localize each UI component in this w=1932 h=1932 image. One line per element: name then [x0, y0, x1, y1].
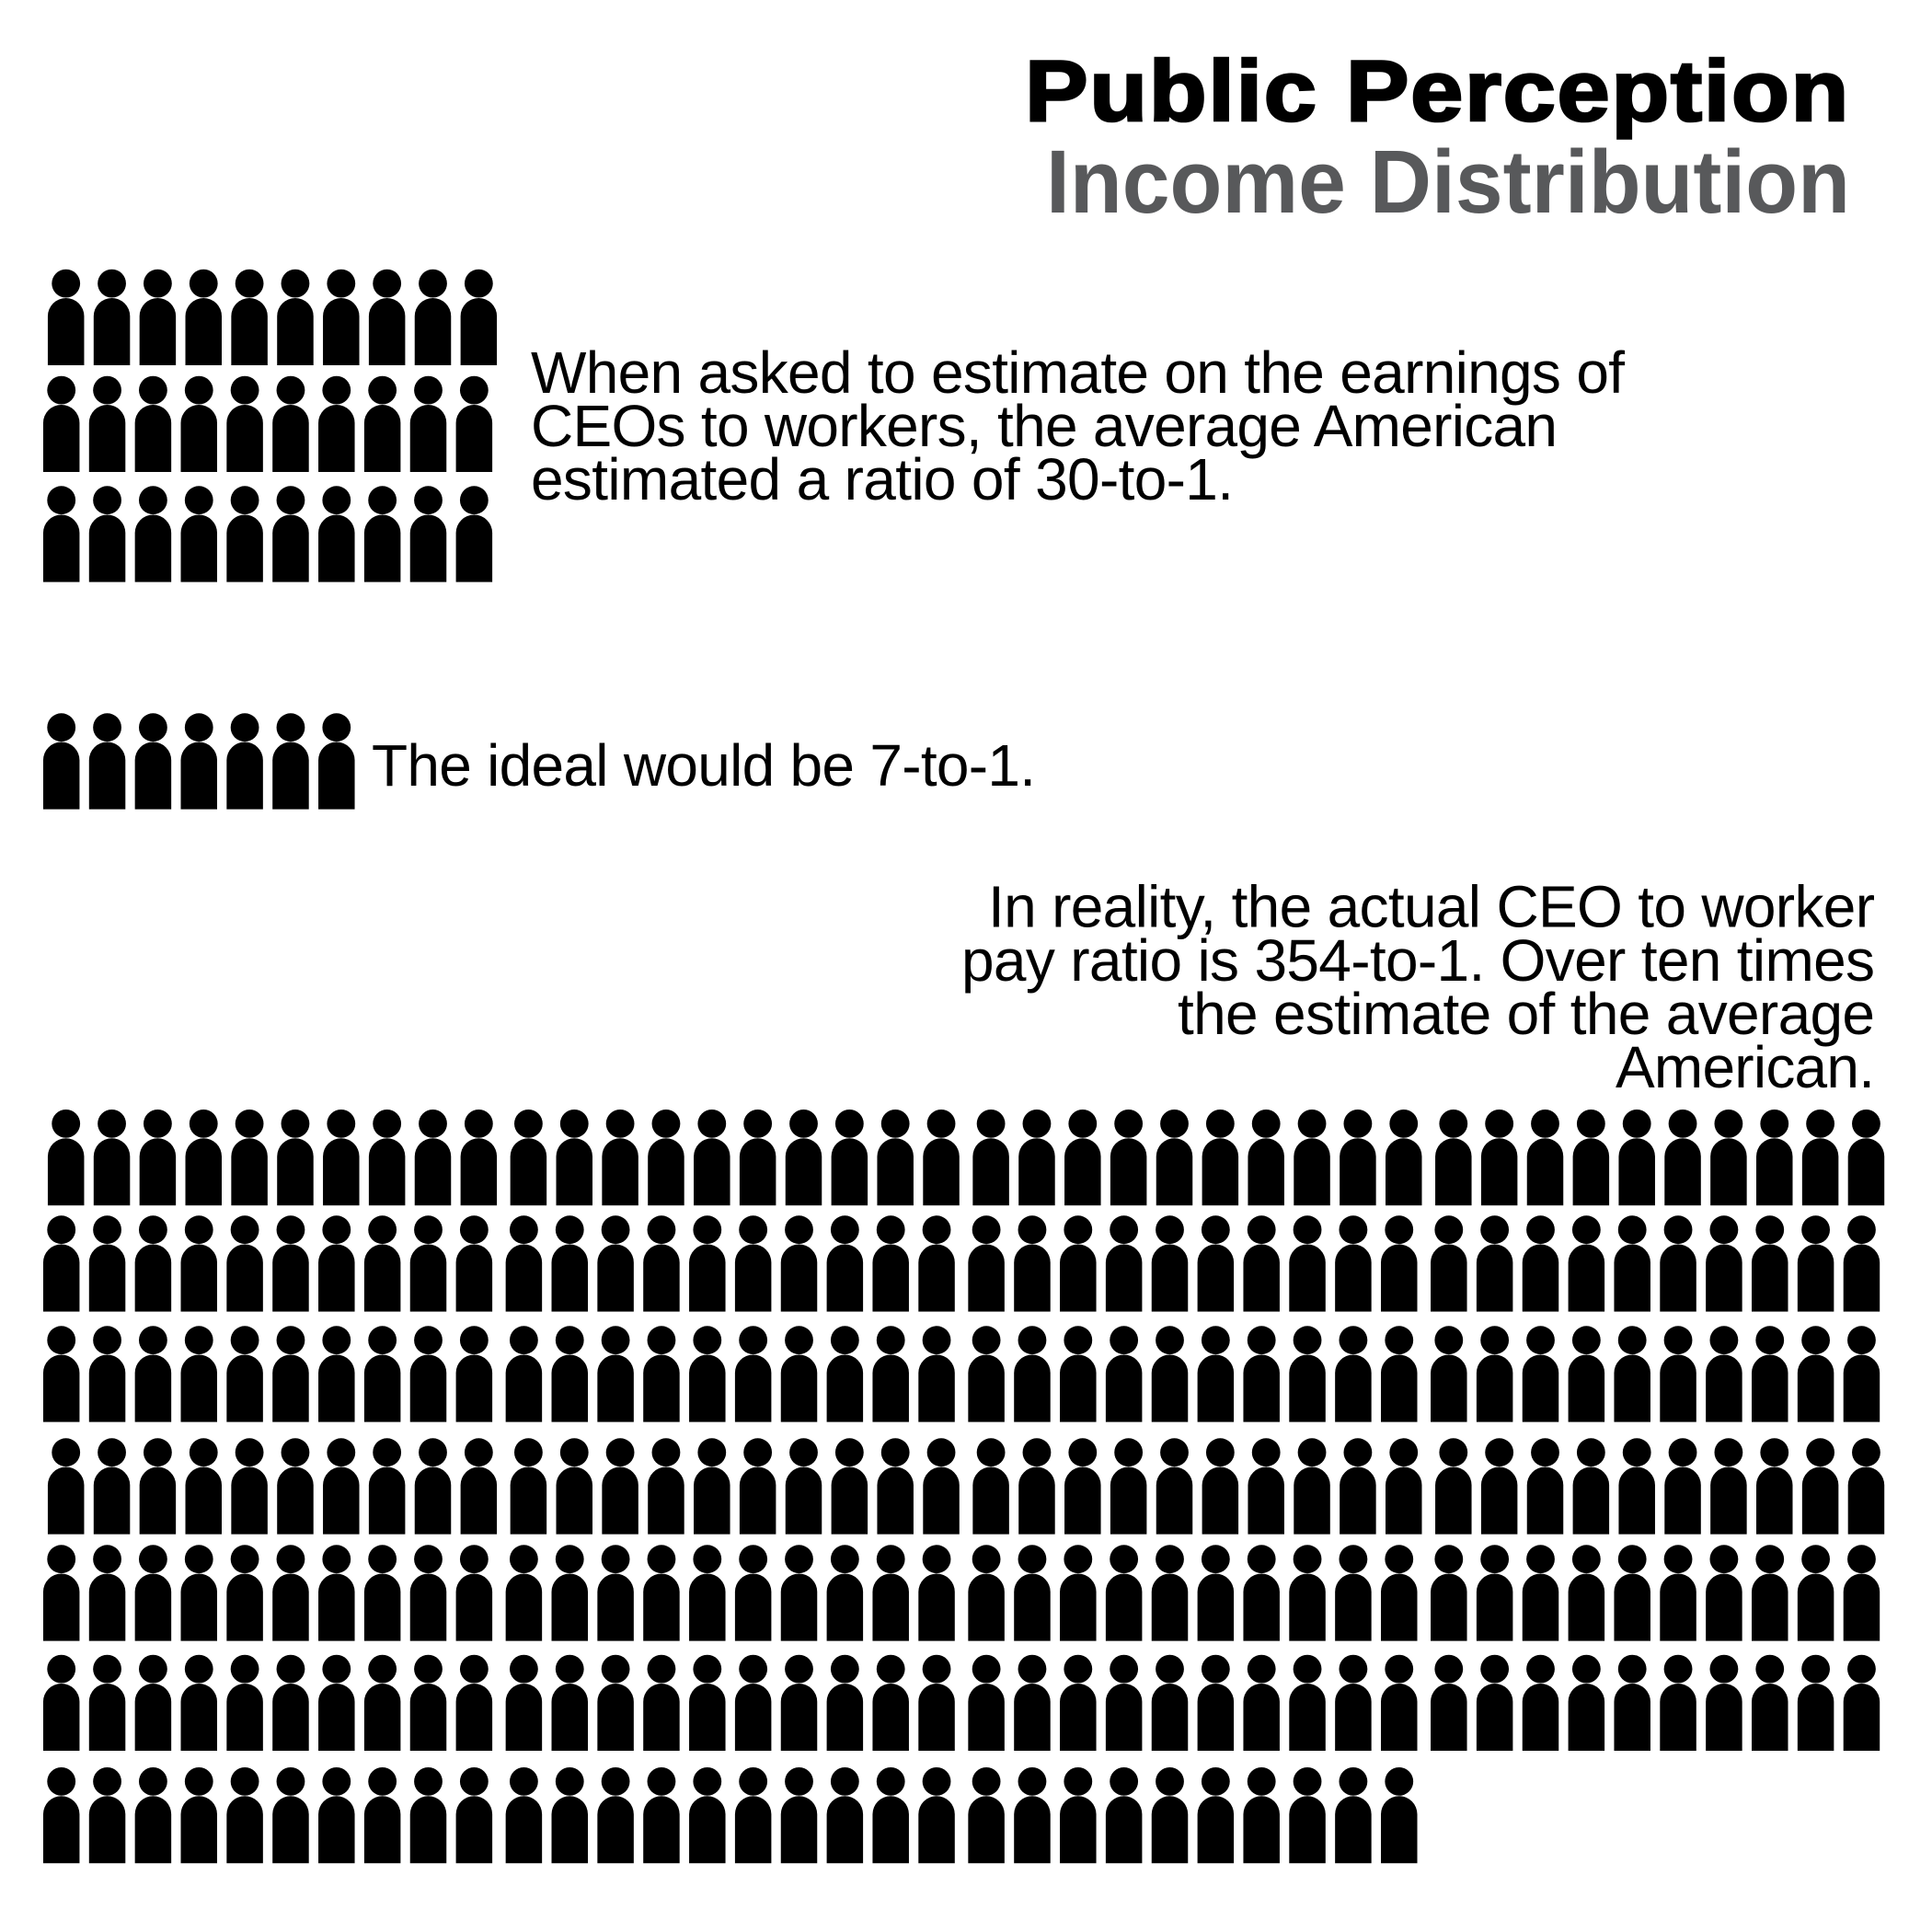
title	[1025, 42, 1850, 232]
text: estimate description	[531, 339, 1625, 512]
row 2 of 10 people	[43, 376, 492, 472]
heading: Public Perception: Public Perception	[1025, 42, 1850, 139]
text: ideal ratio: The ideal would be 7-to-1.	[372, 732, 1036, 799]
text: estimate description: estimated a ratio of 30-to-1.	[531, 446, 1234, 512]
row 5 of 40 people	[43, 1545, 1880, 1641]
text: estimate description: When asked to estimate on the earnings of	[531, 339, 1625, 406]
row 2 of 40 people	[43, 1215, 1880, 1312]
pictogram: actual ratio 354-to-1	[43, 1110, 1884, 1863]
text: actual ratio description: pay ratio is 354-to-1. Over ten times	[961, 927, 1875, 994]
row 6 of 40 people	[43, 1655, 1880, 1751]
heading: Income Distribution: Income Distribution	[1046, 132, 1850, 232]
row 1 of 10 people	[48, 270, 497, 365]
row 3 of 40 people	[43, 1326, 1880, 1422]
text: actual ratio description: the estimate of the average	[1178, 981, 1875, 1047]
pictogram: ideal ratio 7-to-1	[43, 713, 355, 810]
row 7 of 30 people	[43, 1767, 1418, 1863]
text: actual ratio description: American.	[1616, 1034, 1875, 1100]
text: actual ratio description	[961, 874, 1875, 1100]
row 1 of 40 people	[48, 1110, 1884, 1205]
row 4 of 40 people	[48, 1438, 1884, 1535]
pictogram: estimated ratio 30-to-1	[43, 270, 497, 582]
text: actual ratio description: In reality, the actual CEO to worker	[988, 874, 1875, 940]
text: estimate description: CEOs to workers, the average American	[531, 393, 1558, 459]
row 3 of 10 people	[43, 486, 492, 582]
